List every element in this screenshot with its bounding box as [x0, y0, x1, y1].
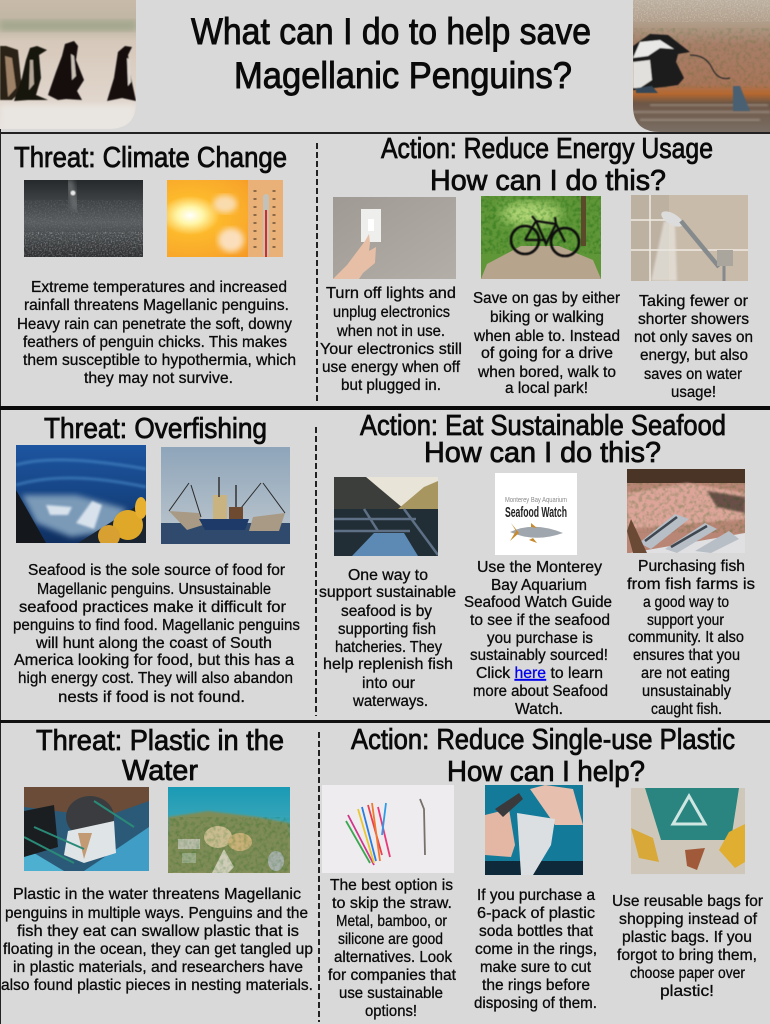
action text: straws: options!	[365, 1003, 417, 1020]
action text: reusable bags: plastic bags. If you	[622, 929, 752, 946]
photo: fish market	[627, 469, 745, 553]
action text: Seafood Watch guide: Click here to learn	[476, 665, 603, 682]
action text: straws: The best option is	[330, 877, 453, 894]
threat text: fish they eat can swallow plastic that is	[17, 923, 299, 940]
photo: penguin tangled in plastic	[24, 787, 149, 871]
action text: Seafood Watch guide: Seafood Watch Guide	[464, 594, 612, 611]
divider 1	[316, 143, 318, 402]
action text: fish farms: support your	[647, 612, 725, 629]
action text: turn off lights	[320, 285, 462, 394]
action text: shorter showers: usage!	[671, 384, 716, 401]
action text: Seafood Watch guide: Use the Monterey	[477, 559, 602, 576]
title	[191, 11, 591, 96]
action text: turn off lights: Your electronics still	[320, 341, 462, 358]
action text: save on gas: biking or walking	[490, 309, 604, 326]
action text: six-pack rings: 6-pack of plastic	[477, 905, 595, 922]
threat text: also found plastic pieces in nesting materials.	[1, 977, 313, 994]
action text: shorter showers: not only saves on	[634, 329, 753, 346]
action text: Seafood Watch guide: Bay Aquarium	[491, 577, 587, 594]
action text: straws: silicone are good	[338, 931, 443, 948]
action text: straws: for companies that	[328, 967, 457, 984]
action text: save on gas: a local park!	[505, 380, 588, 397]
action text: save on gas: of going for a drive	[481, 345, 613, 362]
action text: six-pack rings: the rings before	[482, 977, 590, 994]
title: Magellanic Penguins?	[234, 55, 572, 96]
action text: Seafood Watch guide: Watch.	[515, 701, 563, 718]
heading: threat plastic in the water	[36, 725, 284, 787]
section 2: overfishing	[13, 410, 755, 718]
heading: threat plastic in the water: Water	[122, 755, 198, 787]
action text: save on gas	[473, 290, 621, 397]
photo: heavy rain	[24, 180, 143, 257]
threat text	[17, 279, 296, 387]
threat text: Magellanic penguins. Unsustainable	[37, 581, 271, 598]
action text: save on gas: when bored, walk to	[477, 364, 616, 381]
action text: Seafood Watch guide: sustainably sourced!	[470, 647, 608, 664]
threat text: in plastic materials, and researchers have	[13, 959, 303, 976]
action text: fish farms: a good way to	[643, 594, 729, 611]
photo: bicycle on a forest path	[481, 196, 601, 279]
logo: Seafood Watch	[495, 473, 577, 555]
action text: six-pack rings: If you purchase a	[477, 887, 595, 904]
heading: action reduce energy usage: Action: Reduce Energy Usage	[381, 133, 713, 165]
threat text: rainfall threatens Magellanic penguins.	[24, 297, 289, 314]
threat text: high energy cost. They will also abandon	[18, 670, 293, 687]
action text: shorter showers: saves on water	[644, 366, 743, 383]
photo: reusable recycling bag	[631, 788, 745, 874]
action text: fish farms: ensures that you	[633, 647, 740, 664]
action text: six-pack rings: soda bottles that	[479, 923, 594, 940]
threat text: Plastic in the water threatens Magellanic	[13, 886, 301, 903]
action text: turn off lights: unplug electronics	[333, 304, 450, 321]
section 1: climate change	[14, 133, 753, 402]
action text: fish farms: from fish farms is	[627, 576, 755, 593]
header photo: penguins walking on a beach	[0, 0, 136, 131]
threat text: seafood practices make it difficult for	[19, 599, 287, 616]
action text: turn off lights: use energy when off	[322, 359, 461, 376]
heading: action reduce energy usage: How can I do this?	[430, 165, 666, 197]
heading: threat climate change: Threat: Climate Change	[14, 142, 287, 174]
photo: light switch	[333, 197, 456, 279]
action text: Seafood Watch guide: more about Seafood	[473, 683, 608, 700]
divider 3	[318, 732, 320, 1022]
action text: fish hatcheries: One way to	[348, 567, 428, 584]
title: What can I do to help save	[191, 11, 591, 52]
action text: shorter showers: Taking fewer or	[639, 293, 749, 310]
action text: shorter showers: shorter showers	[638, 311, 749, 328]
threat text: nests if food is not found.	[58, 689, 245, 706]
heading: threat plastic in the water: Threat: Plastic in the	[36, 725, 284, 757]
threat text: Heavy rain can penetrate the soft, downy	[17, 316, 292, 333]
threat text: they may not survive.	[84, 370, 233, 387]
photo: plastic on the sea floor	[168, 787, 290, 873]
action text: straws: to skip the straw.	[332, 895, 452, 912]
action text: shorter showers: energy, but also	[640, 347, 748, 364]
threat text: will hunt along the coast of South	[35, 635, 272, 652]
photo: hands cutting plastic rings	[485, 785, 583, 875]
heading: action reduce energy usage	[381, 133, 713, 197]
action text: straws: alternatives. Look	[334, 949, 453, 966]
heading: action reduce single-use plastic	[351, 724, 735, 788]
action text: fish hatcheries: hatcheries. They	[335, 639, 442, 656]
threat text: America looking for food, but this has a	[14, 652, 294, 669]
action text: straws: use sustainable	[339, 985, 443, 1002]
action text: turn off lights: but plugged in.	[341, 377, 441, 394]
action text: fish hatcheries: support sustainable	[319, 584, 456, 601]
action text: straws: Metal, bamboo, or	[336, 913, 448, 930]
action text: shorter showers	[634, 293, 753, 401]
threat text: Seafood is the sole source of food for	[28, 562, 286, 579]
action text: fish farms: community. It also	[628, 629, 744, 646]
action text: reusable bags: plastic!	[660, 983, 714, 1000]
action text: turn off lights: Turn off lights and	[326, 285, 456, 302]
action text: reusable bags: forgot to bring them,	[617, 947, 757, 964]
photo: fish in a net	[16, 445, 146, 543]
photo: fishing trawler	[161, 447, 290, 544]
action text: reusable bags: choose paper over	[630, 965, 746, 982]
action text: save on gas: Save on gas by either	[473, 290, 621, 307]
action text: Seafood Watch guide: you purchase is	[487, 630, 593, 647]
threat text: penguins to find food. Magellanic penguins	[13, 617, 300, 634]
action text: six-pack rings: come in the rings,	[475, 941, 597, 958]
action text: Seafood Watch guide	[464, 559, 612, 718]
heading: action eat sustainable seafood: Action: Eat Sustainable Seafood	[360, 410, 726, 442]
action text: fish hatcheries: seafood is by	[341, 603, 432, 620]
action text: fish hatcheries: supporting fish	[338, 621, 436, 638]
photo: plastic and metal straws	[322, 785, 454, 873]
action text: reusable bags: Use reusable bags for	[612, 893, 764, 910]
action text: fish hatcheries: into our	[362, 675, 416, 692]
threat text: Extreme temperatures and increased	[31, 279, 287, 296]
action text: save on gas: when able to. Instead	[473, 328, 620, 345]
action text: fish farms: Purchasing fish	[638, 558, 745, 575]
threat text: penguins in multiple ways. Penguins and the	[5, 905, 308, 922]
header photo: penguin at the water's edge	[633, 0, 770, 132]
action text: straws	[328, 877, 457, 1020]
photo: sun and thermometer	[167, 180, 283, 257]
heading: action eat sustainable seafood	[360, 410, 726, 469]
threat text: floating in the ocean, they can get tangled up	[3, 941, 313, 958]
action text: fish farms	[627, 558, 755, 718]
action text: fish hatcheries: help replenish fish	[323, 656, 453, 673]
heading: action reduce single-use plastic: How can I help?	[447, 756, 645, 788]
heading: action eat sustainable seafood: How can I do this?	[424, 437, 661, 469]
divider 2	[315, 427, 317, 716]
section 3: plastic in the water	[1, 724, 764, 1022]
action text: reusable bags: shopping instead of	[619, 911, 758, 928]
threat text: them susceptible to hypothermia, which	[23, 352, 296, 369]
threat text	[1, 886, 313, 994]
action text: six-pack rings: disposing of them.	[474, 995, 597, 1012]
action text: fish farms: are not eating	[641, 665, 730, 682]
threat text: feathers of penguin chicks. This makes	[23, 334, 287, 351]
action text: fish hatcheries	[319, 567, 456, 710]
action text: reusable bags	[612, 893, 764, 1000]
photo: shower head	[631, 195, 748, 281]
photo: fish hatchery pens	[334, 477, 438, 556]
action text: six-pack rings: make sure to cut	[480, 959, 592, 976]
action text: turn off lights: when not in use.	[336, 323, 445, 340]
action text: Seafood Watch guide: to see if the seafood	[470, 612, 610, 629]
threat text	[13, 562, 300, 706]
action text: six-pack rings	[474, 887, 597, 1012]
action text: fish hatcheries: waterways.	[352, 693, 428, 710]
action text: fish farms: caught fish.	[651, 701, 722, 718]
heading: threat overfishing: Threat: Overfishing	[44, 413, 267, 445]
action text: fish farms: unsustainably	[642, 683, 731, 700]
